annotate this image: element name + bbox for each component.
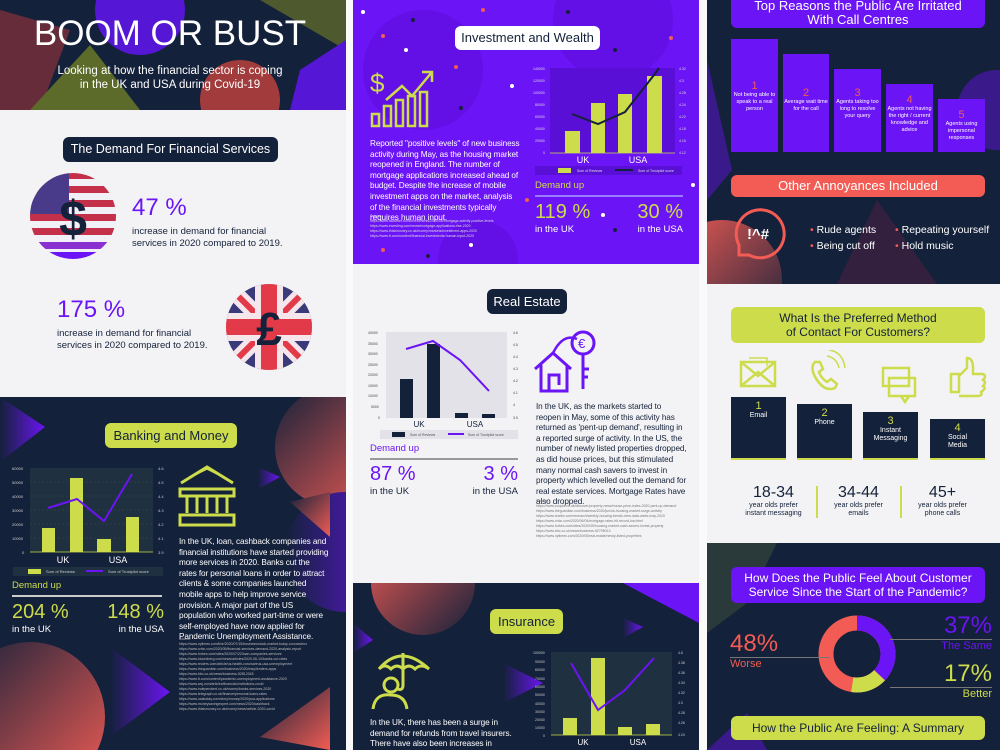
heading: What Is the Preferred Method	[779, 311, 937, 325]
text: sources: https://www.wsj.com/articles/financial-institutions-covid	[179, 682, 263, 686]
chart: top 5 reasons: Average wait time for the call	[784, 99, 828, 112]
panel: demand for financial services	[30, 137, 312, 370]
bar chart: investment: 60000	[535, 115, 545, 119]
panel: investment and wealth	[353, 0, 699, 264]
text: sources: https://www.ft.com/content/financial-investments-human-input-2020	[370, 234, 474, 238]
bar chart: insurance: 4.24	[678, 733, 685, 737]
panel: insurance	[353, 583, 699, 750]
bar chart: insurance: 70000	[535, 677, 545, 681]
heading: How Does the Public Feel About Customer	[744, 571, 972, 585]
bar chart: banking: Sum of Reviews	[46, 569, 75, 574]
stats: age groups: year olds prefer	[918, 502, 967, 509]
bar chart: real estate: Sum of Trustpilot score	[468, 433, 504, 437]
text: sources: https://www.zoopla.co.uk/discover/property-news/house-price-index-2020-pent-up-demand	[536, 504, 676, 508]
heading: With Call Centres	[807, 12, 909, 27]
icons: contact methods	[740, 350, 986, 404]
bar chart: banking: USA	[109, 555, 127, 565]
text: demand up: 30 %	[637, 201, 683, 223]
bar chart: insurance: 40000	[535, 702, 545, 706]
bar chart: real estate: 15000	[368, 384, 378, 388]
bar chart: banking: 4.2	[158, 522, 164, 527]
bar chart: investment: 4.16	[679, 139, 686, 143]
heading: Banking and Money	[114, 428, 228, 443]
bar chart: banking	[12, 466, 164, 576]
text: demand up: Demand up	[12, 580, 61, 591]
panel: banking and money	[0, 397, 346, 750]
text: sources: https://www.cnbc.com/2020/05/financial-services-demand-2020-analysis-report	[179, 647, 301, 651]
bar chart: investment: USA	[629, 155, 647, 165]
text: sources: https://www.realtor.com/research/weekly-housing-trends-view-data-week-may-2020	[536, 514, 665, 518]
panel: public feeling	[707, 543, 1000, 750]
icon: angry speech bubble: !^#	[747, 226, 770, 243]
list: annoyances	[810, 224, 990, 252]
bar chart: banking: 0	[22, 550, 25, 555]
bar chart: investment: 0	[543, 151, 545, 155]
bar chart: investment: 4.32	[679, 67, 686, 71]
list: annoyances: • Hold music	[895, 240, 954, 252]
chart: contact ranking: 1	[755, 400, 762, 412]
bar chart: investment: 4.24	[679, 103, 686, 107]
icon: UK flag pound	[226, 284, 312, 370]
bar chart: insurance: 50000	[535, 693, 545, 697]
bar chart: insurance: 4.26	[678, 721, 685, 725]
chart: top 5 reasons: 5	[958, 109, 965, 121]
bar chart: real estate: 20000	[368, 373, 378, 377]
text: sources: https://www.theguardian.com/business/2020/may/lenders-apps	[179, 667, 276, 671]
stat: the same: 37%	[944, 612, 992, 639]
chart: top 5 reasons: Agents taking too long to resolve your query	[836, 99, 879, 119]
bar chart: investment: 40000	[535, 127, 545, 131]
text: sources: Source:	[536, 499, 548, 503]
stat: worse: 48%	[730, 630, 778, 657]
bar chart: banking: 4.4	[158, 494, 164, 499]
chart: contact ranking: Social	[948, 434, 967, 441]
text: real estate body: In the UK, as the markets started to reopen in May, some of this activity has returned as 'pent-up demand', resulting in a reported surge of activity. In the US, the number of newly listed properties dropped, as did house prices, but this stimulated many normal cash savers to invest in property which levelled out the demand for real estate services. Mortgage Rates have also dropped.	[536, 402, 687, 506]
bar chart: banking: 10000	[12, 536, 24, 541]
bar chart: insurance: 4.38	[678, 661, 685, 665]
chart: contact ranking: Email	[750, 412, 767, 419]
text: sources: https://www.ft.com/content/pandemic-unemployment-assistance-2020	[179, 677, 287, 681]
heading	[105, 423, 237, 448]
text: sources: https://www.independent.co.uk/money/banks-services-2020	[179, 687, 271, 691]
heading: other annoyances	[731, 175, 985, 197]
text: sources: https://www.thisismoney.co.uk/money/news/article-2020-covid	[179, 707, 275, 711]
bar chart: real estate: 4.3	[513, 367, 518, 371]
bar chart: banking: 20000	[12, 522, 24, 527]
text: demand up: in the USA	[119, 624, 164, 635]
donut chart	[818, 616, 896, 692]
bar chart: insurance: 4.6	[678, 651, 683, 655]
subtitle	[57, 65, 283, 91]
bar chart: insurance: 90000	[535, 660, 545, 664]
bar chart: insurance: 100000	[533, 651, 545, 655]
stat: worse: Worse	[730, 658, 762, 670]
text: demand up	[370, 443, 518, 497]
panel: real estate	[353, 264, 699, 583]
heading	[63, 137, 278, 162]
bar chart: investment: 80000	[535, 103, 545, 107]
bar chart: banking: 50000	[12, 480, 24, 485]
bar chart: investment: 4.18	[679, 127, 686, 131]
stats: age groups: instant messaging	[745, 510, 802, 517]
text: demand up: in the USA	[473, 486, 518, 497]
bar chart: real estate: 4	[513, 403, 515, 407]
bar chart: real estate: 5000	[371, 405, 379, 409]
text: demand up: in the UK	[535, 224, 574, 235]
bar chart: banking: 40000	[12, 494, 24, 499]
bar chart: investment: 140000	[533, 67, 545, 71]
text: demand up: 148 %	[107, 601, 164, 623]
stats: age groups: year olds prefer	[834, 502, 883, 509]
heading: summary	[731, 716, 985, 740]
icon: US flag dollar: $	[59, 191, 87, 247]
stat: better: 17%	[944, 660, 992, 687]
text: 47 desc: services in 2020 compared to 2019.	[132, 238, 283, 249]
text: demand up: Demand up	[535, 180, 584, 191]
list: annoyances: • Rude agents	[810, 224, 876, 236]
chart: top 5 reasons: Agents using impersonal responses	[946, 121, 977, 141]
bar chart: investment: 20000	[535, 139, 545, 143]
stat: the same: The Same	[941, 640, 992, 652]
text: sources: Source:	[179, 637, 191, 641]
bar chart: real estate: 4.2	[513, 379, 518, 383]
text: sources: https://www.reuters.com/article/us-health-coronavirus-usa-unemployment	[179, 662, 292, 666]
heading: summary: How the Public Are Feeling: A Summary	[752, 721, 964, 735]
bar chart: banking: 3.9	[158, 550, 164, 555]
stat: better	[890, 660, 992, 700]
bar chart: insurance: USA	[630, 738, 647, 747]
chart: contact ranking: 4	[954, 422, 961, 434]
bar chart: investment: 4.28	[679, 91, 686, 95]
text: sources: https://www.theguardian.com/business/2020/jun/uk-housing-market-surge-activity	[536, 509, 662, 513]
bar chart: real estate: 0	[378, 416, 380, 420]
bar chart: real estate: 30000	[368, 352, 378, 356]
text: demand up: in the USA	[638, 224, 683, 235]
chart: top 5 reasons: 2	[803, 87, 809, 99]
bar chart: banking: 4.1	[158, 536, 164, 541]
text: 175 desc: increase in demand for financial	[57, 328, 191, 339]
heading	[490, 609, 563, 634]
chart: top 5 reasons: 3	[854, 87, 861, 99]
text: sources	[179, 637, 307, 711]
chart: top 5 reasons: Not being able to speak to a real person	[734, 92, 775, 112]
heading: Investment and Wealth	[461, 30, 594, 45]
icon: UK flag pound: £	[256, 303, 282, 355]
text: sources: https://www.bbc.co.uk/news/business-52812345	[179, 672, 254, 676]
bar chart: insurance: 20000	[535, 718, 545, 722]
bar chart: banking: 4.6	[158, 466, 164, 471]
icon: umbrella and person	[372, 653, 430, 710]
heading: The Demand For Financial Services	[71, 142, 270, 156]
list: annoyances: • Repeating yourself	[895, 224, 989, 236]
subtitle: in the UK and USA during Covid-19	[80, 79, 260, 91]
bar chart: real estate: USA	[467, 420, 484, 429]
bar chart: real estate: 4.6	[513, 331, 518, 335]
text: investment body: Reported "positive levels" of new business activity during May, as the housing market reopened in England. The number of mortgage applications increased ahead of budget. Despite the increase of mobile investment apps on the market, analysis of the financial investments typically requires human input.	[370, 139, 520, 222]
bar chart: investment: 100000	[533, 91, 545, 95]
icon: US flag dollar	[30, 173, 116, 259]
stats: age groups	[745, 484, 967, 518]
bar chart: real estate: 25000	[368, 363, 378, 367]
icon: growth chart	[370, 68, 434, 128]
bar chart: investment: 4.22	[679, 115, 686, 119]
bar chart: insurance: 4.32	[678, 691, 685, 695]
text: demand up: 119 %	[535, 201, 590, 223]
heading	[487, 289, 567, 314]
bar chart: banking: 4.3	[158, 508, 164, 513]
subtitle: Looking at how the financial sector is coping	[57, 65, 283, 77]
bar chart: insurance: 4.36	[678, 671, 685, 675]
bar chart: investment: UK	[577, 155, 589, 165]
bar chart: real estate: 4.5	[513, 343, 518, 347]
stat: 47%: 47 %	[132, 194, 187, 221]
text: demand up: 87 %	[370, 463, 416, 485]
bar chart: insurance: 80000	[535, 668, 545, 672]
chart: contact ranking: Phone	[814, 419, 835, 426]
text: demand up: Demand up	[370, 443, 419, 454]
chart: top 5 reasons: 1	[751, 80, 758, 92]
chart: contact ranking: 3	[887, 415, 894, 427]
icon: angry speech bubble	[734, 208, 786, 260]
bar chart: banking: UK	[57, 555, 69, 565]
bar chart: real estate: 40000	[368, 331, 378, 335]
panel: header	[0, 0, 346, 110]
text: demand up	[12, 580, 164, 635]
heading	[731, 0, 985, 28]
stat: 175%: 175 %	[57, 296, 125, 323]
text: sources: https://www.telegraph.co.uk/finance/personal-loans-rates	[179, 692, 267, 696]
list: annoyances: • Being cut off	[810, 240, 875, 252]
text: demand up: in the UK	[12, 624, 51, 635]
text: sources: Source:	[370, 214, 382, 218]
stats: age groups: year olds prefer	[749, 502, 798, 509]
bar chart: insurance: 4.3	[678, 701, 683, 705]
text: demand up: in the UK	[370, 486, 409, 497]
chart: top 5 reasons: Agents not having the right / current knowledge and advice	[887, 106, 932, 133]
bar chart: banking: 4.5	[158, 480, 164, 485]
icon: house and key: €	[578, 336, 586, 351]
bar chart: insurance: 10000	[535, 726, 545, 730]
title: BOOM OR BUST	[34, 14, 306, 53]
bar chart: real estate: Sum of Reviews	[410, 433, 436, 437]
text: sources: https://www.cnbc.com/2020/06/04/mortgage-rates-hit-record-low.html	[536, 519, 643, 523]
chart: contact ranking: Messaging	[874, 435, 907, 442]
bar chart: insurance: 30000	[535, 710, 545, 714]
bar chart: investment: 4.3	[679, 79, 684, 83]
heading	[731, 567, 985, 603]
heading: Insurance	[498, 614, 555, 629]
heading	[731, 307, 985, 343]
text: sources: https://www.bloomberg.com/news/articles/2020-06-10/banks-cut-rates	[179, 657, 287, 661]
text: demand up	[535, 180, 683, 235]
text: sources	[370, 214, 494, 238]
heading: of Contact For Customers?	[786, 325, 930, 339]
text: sources: https://www.investing.com/news/mortgage-applications-rise-2020	[370, 224, 471, 228]
bar chart: insurance: 0	[543, 734, 545, 738]
text: sources: https://www.moneysavingexpert.com/news/2020/cashback	[179, 702, 269, 706]
bar chart: investment: Sum of Trustpilot score	[638, 169, 674, 173]
bar chart: insurance	[533, 651, 685, 747]
stats: age groups: 45+	[929, 484, 956, 501]
stats: age groups: emails	[848, 510, 869, 517]
bar chart: real estate: 10000	[368, 394, 378, 398]
text: 47 desc	[132, 226, 283, 249]
bar chart: real estate: 4.1	[513, 391, 518, 395]
bar chart: investment: 120000	[533, 79, 545, 83]
text: sources: https://www.thisismoney.co.uk/money/markets/investment-apps-2020	[370, 229, 477, 233]
text: demand up: 204 %	[12, 601, 69, 623]
bar chart: real estate: UK	[413, 420, 425, 429]
bar chart: real estate	[368, 331, 518, 439]
heading: other annoyances: Other Annoyances Included	[778, 178, 938, 193]
stats: age groups: 34-44	[838, 484, 879, 501]
icon: house and key	[534, 330, 596, 392]
bar chart: real estate: 4.4	[513, 355, 518, 359]
text: 175 desc: services in 2020 compared to 2019.	[57, 340, 208, 351]
panel: call centre irritations	[707, 0, 1000, 284]
icon: growth chart: $	[370, 68, 385, 98]
stats: age groups: 18-34	[753, 484, 794, 501]
heading: Real Estate	[493, 294, 561, 309]
bar chart: banking: 60000	[12, 466, 24, 471]
text: sources: https://www.forbes.com/sites/2020/05/housing-market-cash-savers-invest-property	[536, 524, 663, 528]
text: 47 desc: increase in demand for financial	[132, 226, 266, 237]
icon: bank	[178, 465, 236, 526]
text: sources: https://www.nytimes.com/2020/06/real-estate/newly-listed-properties	[536, 534, 642, 538]
chart: contact ranking: Media	[948, 442, 967, 449]
bar chart: banking: 30000	[12, 508, 24, 513]
chart: top 5 reasons: 4	[906, 94, 913, 106]
text: sources: https://www.usatoday.com/story/money/2020/pua-applications	[179, 697, 275, 701]
chart: contact ranking: Instant	[880, 427, 901, 434]
panel: preferred contact method	[707, 284, 1000, 543]
text: demand up: 3 %	[484, 463, 518, 485]
bar chart: investment: 4.12	[679, 151, 686, 155]
text: banking body: In the UK, loan, cashback companies and financial institutions have started providing more services in 2020. Banks cut the rates for personal loans in order to attract clients & some companies launched mobile apps to help improve service provision. A major part of the US population who worked part-time or were self-employed have now applied for Pandemic Unemployment Assistance.	[179, 537, 328, 641]
text: 175 desc	[57, 328, 208, 351]
bar chart: insurance: 4.34	[678, 681, 685, 685]
text: sources	[536, 499, 676, 538]
text: sources: https://www.bbc.co.uk/news/business-52795014	[536, 529, 611, 533]
heading	[455, 26, 600, 50]
bar chart: banking: Sum of Trustpilot score	[108, 569, 150, 574]
stat: worse	[730, 630, 830, 670]
text: sources: https://www.nytimes.com/live/2020/07/15/business/stock-market-today-coronavirus	[179, 642, 307, 646]
stat: the same	[890, 612, 992, 652]
chart: top 5 reasons	[731, 39, 985, 152]
bar chart: investment: Sum of Reviews	[577, 169, 603, 173]
stat: better: Better	[963, 688, 992, 700]
stats: age groups: phone calls	[925, 510, 960, 517]
bar chart: insurance: 60000	[535, 685, 545, 689]
bar chart: real estate: 3.9	[513, 416, 518, 420]
chart: contact ranking	[731, 397, 985, 460]
bar chart: insurance: UK	[577, 738, 589, 747]
text: sources: https://www.forbes.com/sites/2020/07/22/loan-companies-services	[179, 652, 282, 656]
bar chart: real estate: 35000	[368, 342, 378, 346]
chart: contact ranking: 2	[821, 407, 828, 419]
bar chart: investment	[533, 67, 686, 175]
heading: Service Since the Start of the Pandemic?	[749, 585, 967, 599]
text: sources: https://www.ftadviser.com/investments/2020/06/mortgage-activity-positive-levels	[370, 219, 494, 223]
bar chart: insurance: 4.28	[678, 711, 685, 715]
